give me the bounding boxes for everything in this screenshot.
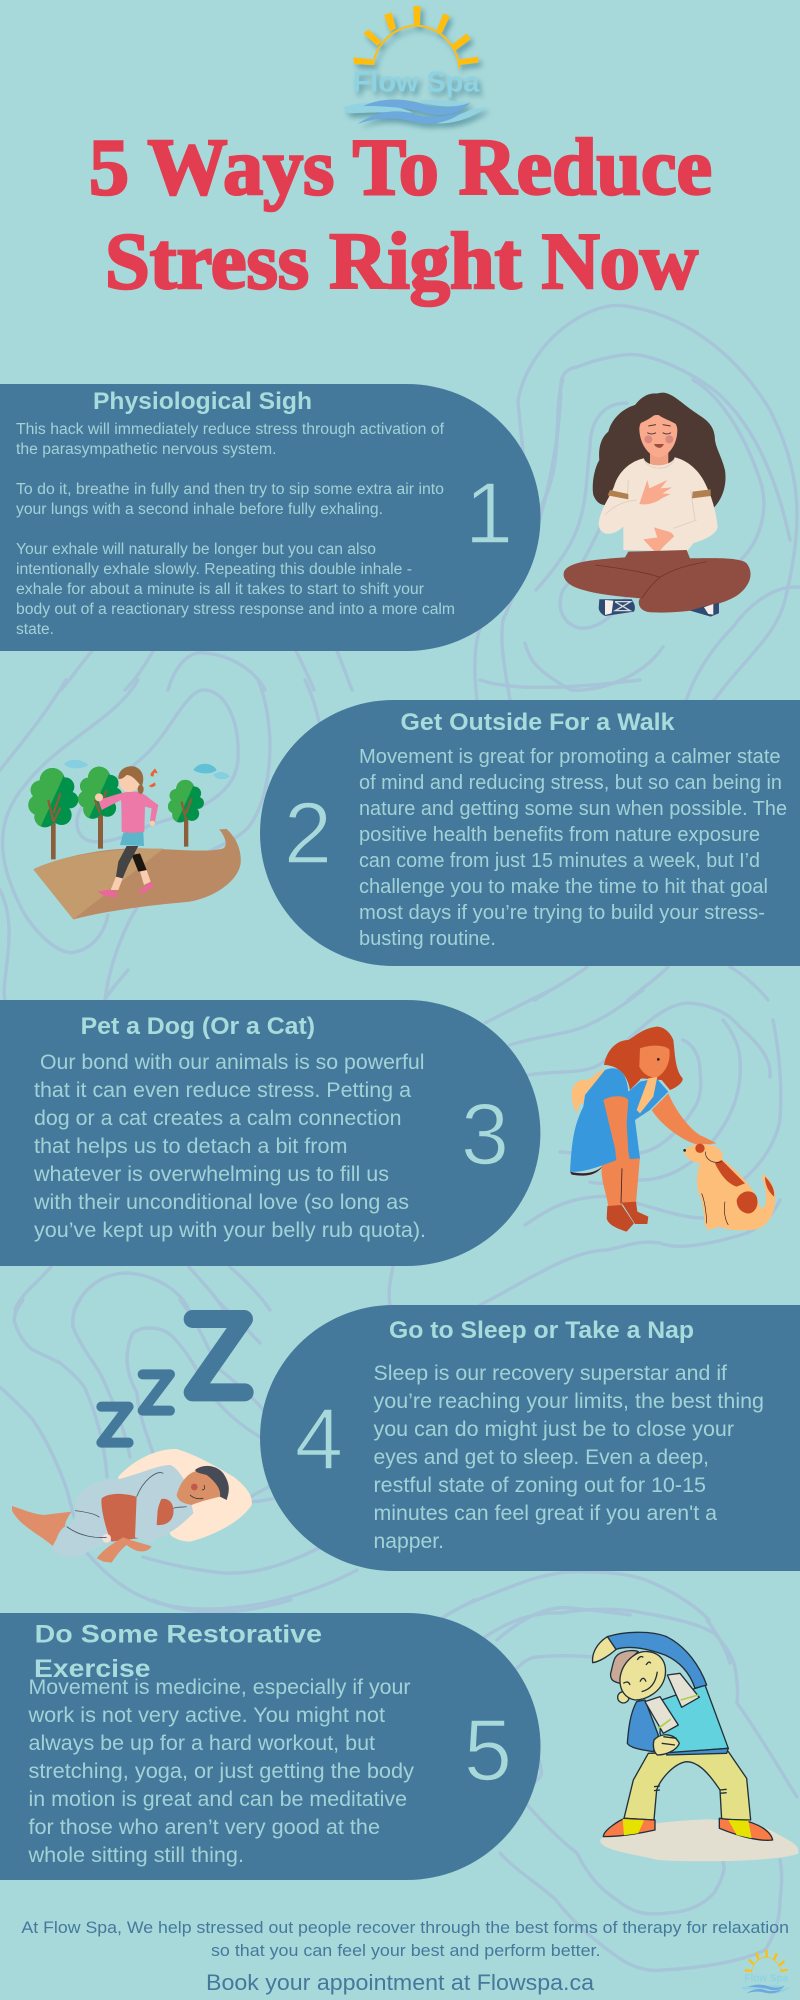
panel background	[260, 1305, 800, 1571]
number 4: 4	[295, 1391, 343, 1488]
title line 2: Stress Right Now	[105, 218, 698, 306]
heading: Physiological Sigh	[93, 388, 312, 415]
closing statement: so that you can feel your best and perform better.	[211, 1941, 600, 1960]
small logo waves	[741, 1985, 791, 1994]
closing statement: At Flow Spa, We help stressed out people recover through the best forms of therapy for relaxation	[21, 1918, 789, 1937]
heading	[34, 1621, 322, 1683]
body text: eyes and get to sleep. Even a deep,	[374, 1446, 709, 1469]
body text: exhale for about a minute is all it takes to start to shift your	[16, 581, 424, 598]
body text: Movement is great for promoting a calmer state	[359, 746, 781, 768]
body text: with their unconditional love (so long as	[33, 1191, 409, 1214]
body text: Movement is medicine, especially if your	[28, 1676, 410, 1699]
closing statement	[21, 1918, 789, 1960]
body text: intentionally exhale slowly. Repeating this double inhale -	[16, 561, 412, 578]
panel 3: pet a dog	[0, 1000, 540, 1266]
body text: state.	[16, 621, 54, 638]
body text: you’re reaching your limits, the best thing	[374, 1390, 764, 1413]
body text: This hack will immediately reduce stress through activation of	[16, 421, 445, 438]
panel background	[0, 384, 540, 651]
heading: Do Some Restorative	[35, 1621, 322, 1649]
small logo sun	[745, 1950, 788, 1973]
body text: positive health benefits from nature exposure	[359, 824, 760, 846]
body text: nature and getting some sun when possible. The	[359, 798, 787, 820]
logo: Flow Spa	[343, 6, 487, 124]
body text: Your exhale will naturally be longer but you can also	[16, 541, 376, 558]
illustration: sleeping person with zzz	[12, 1319, 252, 1563]
call to action: Book your appointment at Flowspa.ca	[206, 1970, 594, 1995]
body text: the parasympathetic nervous system.	[16, 441, 276, 458]
illustration: woman breathing cross-legged	[564, 393, 751, 617]
panel background	[0, 1613, 540, 1880]
body text: challenge you to make the time to hit that goal	[359, 876, 768, 898]
body text	[374, 1362, 764, 1553]
body text: whole sitting still thing.	[27, 1844, 244, 1867]
body text: that it can even reduce stress. Petting a	[34, 1079, 411, 1102]
illustration: man doing a side stretch	[593, 1632, 798, 1861]
panel background	[260, 700, 800, 966]
number 1: 1	[465, 465, 513, 562]
body text: busting routine.	[359, 928, 496, 950]
panel 5: restorative exercise	[0, 1613, 540, 1880]
logo wordmark: Flow Spa	[353, 67, 480, 99]
number 5: 5	[464, 1702, 512, 1799]
heading: Exercise	[34, 1655, 151, 1683]
small logo wordmark: Flow Spa	[744, 1973, 788, 1985]
body text: napper.	[374, 1530, 444, 1553]
body text: stretching, yoga, or just getting the body	[28, 1760, 415, 1783]
sun rays and arc	[353, 6, 478, 68]
panel 4: go to sleep or take a nap	[260, 1305, 800, 1571]
body text: whatever is overwhelming us to fill us	[33, 1163, 389, 1186]
body text: that helps us to detach a bit from	[34, 1135, 348, 1158]
body text: restful state of zoning out for 10-15	[374, 1474, 706, 1497]
number 3: 3	[461, 1086, 509, 1183]
title line 1: 5 Ways To Reduce	[89, 124, 712, 212]
heading: Go to Sleep or Take a Nap	[389, 1317, 694, 1344]
illustration: woman petting a dog	[570, 1027, 775, 1232]
body text: Sleep is our recovery superstar and if	[374, 1362, 727, 1385]
number 2: 2	[284, 785, 332, 882]
title	[89, 124, 712, 306]
heading: Get Outside For a Walk	[400, 709, 675, 736]
panel 1: physiological sigh	[0, 384, 540, 651]
logo waves	[343, 99, 487, 124]
heading: Pet a Dog (Or a Cat)	[81, 1013, 315, 1040]
body text	[33, 1051, 426, 1242]
body text: for those who aren’t very good at the	[28, 1816, 380, 1839]
small footer logo	[741, 1950, 791, 1994]
body text	[359, 746, 787, 950]
body text: your lungs with a second inhale before fully exhaling.	[16, 501, 383, 518]
body text: minutes can feel great if you aren't a	[374, 1502, 717, 1525]
illustration: woman walking among trees	[28, 760, 241, 919]
body text: of mind and reducing stress, but so can being in	[359, 772, 782, 794]
panel 2: get outside for a walk	[260, 700, 800, 966]
body text: in motion is great and can be meditative	[28, 1788, 407, 1811]
body text: you can do might just be to close your	[374, 1418, 734, 1441]
body text: always be up for a hard workout, but	[28, 1732, 375, 1755]
footer text	[21, 1918, 789, 1995]
body text	[27, 1676, 415, 1867]
body text	[16, 421, 455, 638]
body text: dog or a cat creates a calm connection	[34, 1107, 402, 1130]
body text: can come from just 15 minutes a week, but I’d	[359, 850, 760, 872]
body text: body out of a reactionary stress response and into a more calm	[16, 601, 455, 618]
body text: you’ve kept up with your belly rub quota).	[34, 1219, 426, 1242]
body text: Our bond with our animals is so powerful	[40, 1051, 425, 1074]
body text: work is not very active. You might not	[27, 1704, 385, 1727]
body text: most days if you’re trying to build your stress-	[359, 902, 765, 924]
body text: To do it, breathe in fully and then try to sip some extra air into	[16, 481, 444, 498]
panel background	[0, 1000, 540, 1266]
